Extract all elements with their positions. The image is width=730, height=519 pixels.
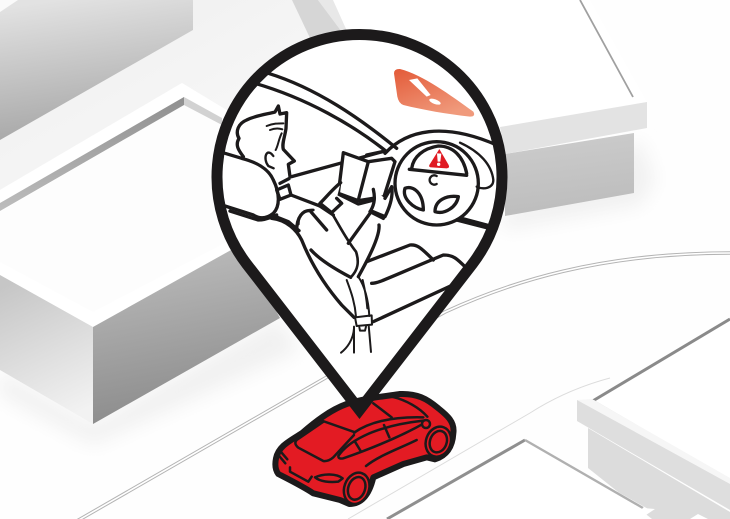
location pin	[217, 34, 502, 508]
wheel rim	[395, 142, 478, 225]
road: thin line	[348, 378, 610, 519]
ground between buildings	[0, 0, 345, 190]
building: lower centre	[387, 440, 655, 519]
driver head and headrest	[225, 106, 327, 231]
building: large left	[0, 83, 300, 445]
road: double line	[77, 253, 730, 519]
book and hands	[318, 153, 395, 218]
steering wheel and dashboard	[385, 131, 497, 227]
building: top centre	[292, 0, 655, 230]
pin outline	[217, 34, 502, 410]
windshield pillar	[255, 73, 397, 177]
building: lower right	[577, 319, 730, 519]
red car	[275, 394, 455, 508]
driver torso, seat belt and seat	[230, 210, 489, 353]
car details	[278, 397, 455, 508]
building: top left	[0, 0, 193, 140]
head-up display warning	[394, 69, 474, 117]
dashboard warning icon	[429, 149, 449, 168]
illustration: driver reading in car	[225, 69, 497, 353]
car body	[275, 394, 454, 504]
pin fill	[217, 34, 502, 410]
